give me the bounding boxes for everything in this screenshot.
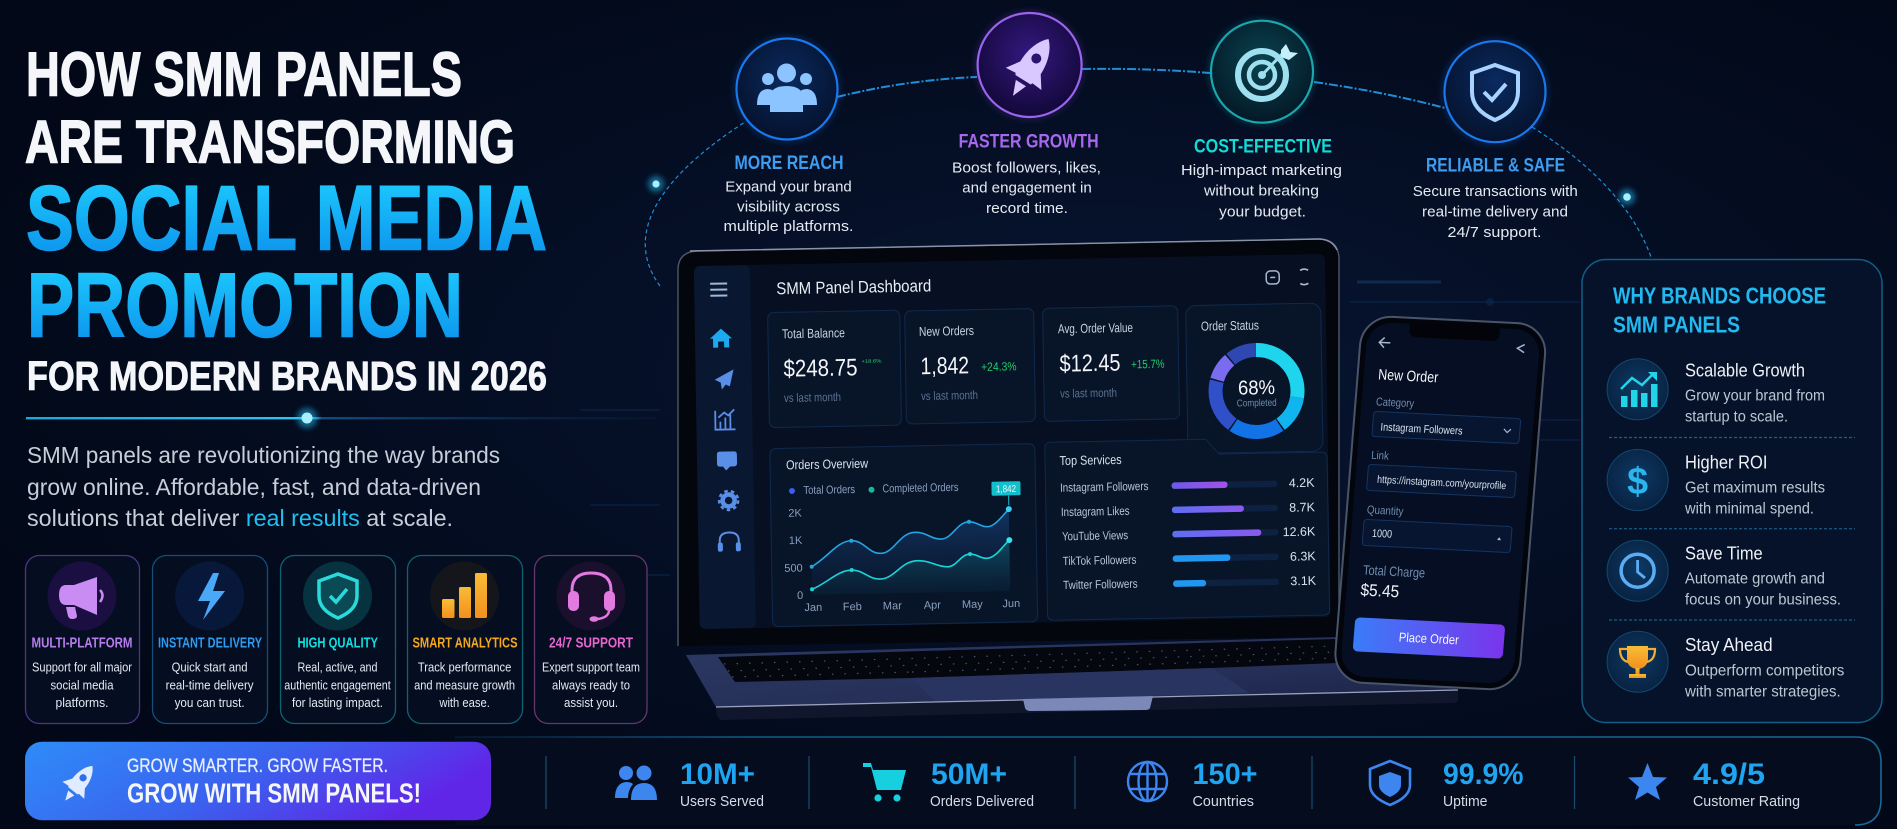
- card: smart analytics: and measure growth: [414, 677, 515, 692]
- feature: reliable & safe: Secure transactions with: [1413, 183, 1578, 200]
- card: multi-platform: social media: [50, 677, 114, 692]
- icon: people: [757, 64, 817, 112]
- stat: customer rating: [1628, 758, 1800, 810]
- feature: reliable & safe: 24/7 support.: [1448, 224, 1542, 241]
- panel: why brands choose: [1582, 260, 1882, 722]
- icon: cart: [863, 763, 906, 802]
- feature: cost-effective: without breaking: [1203, 183, 1319, 200]
- panel heading: [1613, 282, 1826, 337]
- stat card: average order value: +15.7%: [1131, 357, 1165, 371]
- bar list: top services: Instagram Likes: [1061, 504, 1130, 519]
- icon: shield check: [1472, 65, 1518, 120]
- intro paragraph: grow online. Affordable, fast, and data-driven: [27, 474, 481, 500]
- feature: more reach: multiple platforms.: [724, 218, 854, 235]
- bar list: top services: 6.3K: [1290, 549, 1316, 564]
- feature: faster growth: record time.: [986, 200, 1068, 217]
- stat card: total balance: $248.75: [783, 354, 858, 383]
- phone: Total Charge: [1363, 562, 1426, 581]
- dashboard screen: SMM Panel Dashboard: [776, 276, 931, 298]
- line chart: orders overview: May: [962, 599, 983, 611]
- icon: megaphone: [59, 577, 102, 619]
- line chart: orders overview: Mar: [883, 600, 902, 613]
- stat card: new orders: 1,842: [920, 352, 969, 380]
- item: stay ahead: with smarter strategies.: [1684, 684, 1841, 701]
- item: scalable growth: startup to scale.: [1685, 409, 1788, 426]
- title: FOR MODERN BRANDS IN 2026: [27, 353, 547, 399]
- title: SOCIAL MEDIA: [26, 168, 547, 270]
- panel: feature cards: [26, 556, 647, 724]
- bar list: top services: YouTube Views: [1062, 528, 1128, 543]
- stat: users served: [615, 758, 764, 810]
- bar list: top services: 8.7K: [1289, 500, 1316, 515]
- card: high quality: for lasting impact.: [292, 695, 383, 710]
- stat card: average order value: Avg. Order Value: [1058, 320, 1133, 336]
- feature: cost-effective: [1181, 20, 1342, 221]
- icon: globe: [1128, 762, 1167, 801]
- dashed connector arc: [645, 69, 1651, 286]
- card: high quality: Real, active, and: [298, 660, 378, 675]
- order form: [1362, 396, 1522, 553]
- line chart: orders overview: Jun: [1002, 598, 1020, 610]
- feature: faster growth: [952, 12, 1101, 217]
- phone header icons: [1379, 337, 1525, 355]
- card: instant delivery: INSTANT DELIVERY: [158, 635, 262, 651]
- stat: orders delivered: 50M+: [931, 758, 1007, 791]
- icon: target: [1238, 44, 1298, 99]
- bar list: top services: 3.1K: [1290, 574, 1317, 588]
- title: ARE TRANSFORMING: [25, 108, 515, 176]
- intro paragraph: SMM panels are revolutionizing the way brands: [27, 442, 500, 468]
- gear: [719, 491, 738, 510]
- phone: $5.45: [1360, 580, 1400, 601]
- item: stay ahead: Stay Ahead: [1685, 635, 1773, 655]
- stat card: new orders: vs last month: [921, 388, 978, 403]
- icon: rocket: [995, 28, 1066, 107]
- bar list: top services: Instagram Followers: [1060, 479, 1149, 495]
- item: stay ahead: [1607, 631, 1845, 701]
- card: smart analytics: Track performance: [418, 660, 511, 675]
- stat: uptime: 99.9%: [1443, 758, 1524, 791]
- phone notch: [1409, 323, 1500, 341]
- call to action banner: [25, 742, 491, 820]
- line chart: orders overview: Feb: [843, 601, 862, 613]
- button: place order: [1353, 617, 1505, 659]
- card: multi-platform: [26, 556, 140, 724]
- laptop base: [686, 637, 1458, 720]
- item: scalable growth: Grow your brand from: [1685, 388, 1825, 405]
- feature: cost-effective: High-impact marketing: [1181, 162, 1342, 179]
- stat card: average order value: $12.45: [1059, 350, 1121, 378]
- feature: more reach: [724, 37, 854, 235]
- stat: customer rating: 4.9/5: [1693, 758, 1765, 791]
- header icons: [1266, 269, 1308, 285]
- order form: 1000: [1372, 528, 1393, 541]
- card: instant delivery: Quick start and: [172, 660, 248, 675]
- bar list: top services: TikTok Followers: [1063, 553, 1137, 568]
- icon: shield check: [319, 574, 357, 618]
- title: HOW SMM PANELS: [26, 40, 462, 110]
- bar list: top services: [1045, 437, 1330, 620]
- card: multi-platform: MULTI-PLATFORM: [32, 635, 132, 651]
- card: high quality: authentic engagement: [284, 677, 391, 692]
- card: high quality: [280, 556, 396, 724]
- panel heading: WHY BRANDS CHOOSE: [1613, 282, 1826, 308]
- title: PROMOTION: [27, 256, 463, 356]
- stat card: average order value: vs last month: [1060, 386, 1117, 401]
- connector nodes: [648, 176, 1635, 205]
- dashboard screen: [694, 254, 1331, 629]
- card: 24/7 support: assist you.: [564, 695, 618, 710]
- donut: order status: Completed: [1237, 398, 1277, 409]
- icon: bar chart: [442, 573, 487, 618]
- icon: shield: [1370, 761, 1410, 805]
- card: 24/7 support: Expert support team: [542, 660, 640, 675]
- stat card: total balance: +18.6%: [861, 358, 882, 365]
- card: instant delivery: [152, 556, 268, 724]
- card: 24/7 support: 24/7 SUPPORT: [549, 635, 633, 651]
- feature: more reach: Expand your brand: [725, 179, 852, 196]
- donut: order status: 68%: [1238, 377, 1275, 400]
- item: save time: Save Time: [1685, 543, 1763, 563]
- line chart: orders overview: 1K: [789, 535, 803, 547]
- tooltip: 1,842: [996, 484, 1016, 495]
- panel heading: SMM PANELS: [1613, 311, 1740, 337]
- line chart: orders overview: Total Orders: [803, 484, 855, 497]
- card: high quality: HIGH QUALITY: [297, 635, 378, 651]
- intro paragraph: solutions that deliver real results at scale.: [27, 505, 453, 531]
- feature: reliable & safe: RELIABLE & SAFE: [1426, 155, 1565, 177]
- line chart: orders overview: 0: [797, 590, 803, 602]
- feature: faster growth: FASTER GROWTH: [959, 130, 1099, 152]
- feature: faster growth: Boost followers, likes,: [952, 160, 1101, 177]
- stat: countries: Countries: [1192, 794, 1254, 810]
- item: scalable growth: [1607, 359, 1825, 426]
- item: higher roi: [1607, 450, 1825, 517]
- item: stay ahead: Outperform competitors: [1685, 663, 1845, 680]
- feature: more reach: visibility across: [737, 199, 840, 216]
- order form: Category: [1376, 396, 1415, 410]
- button: place order: Place Order: [1398, 630, 1460, 648]
- donut: order status: Order Status: [1201, 318, 1259, 334]
- feature: reliable & safe: real-time delivery and: [1422, 204, 1568, 221]
- icon: trophy: [1620, 646, 1655, 678]
- card: multi-platform: platforms.: [56, 695, 108, 710]
- stat card: total balance: [768, 310, 901, 428]
- line chart: orders overview: 2K: [788, 507, 803, 520]
- item: higher roi: Get maximum results: [1685, 479, 1825, 496]
- stat card: new orders: [905, 309, 1035, 424]
- line chart: orders overview: [770, 444, 1038, 627]
- stat card: average order value: [1043, 306, 1179, 421]
- call to action banner: GROW SMARTER. GROW FASTER.: [127, 756, 388, 777]
- feature: faster growth: and engagement in: [962, 180, 1092, 197]
- icon: headset: [568, 573, 615, 622]
- line chart: orders overview: Jan: [804, 602, 822, 614]
- item: save time: [1607, 540, 1841, 608]
- stat: countries: 150+: [1192, 758, 1258, 791]
- title: [25, 40, 547, 399]
- icon: dollar: $: [1627, 461, 1648, 503]
- item: scalable growth: Scalable Growth: [1685, 361, 1805, 381]
- icon: lightning bolt: [198, 573, 225, 620]
- stat: customer rating: Customer Rating: [1693, 794, 1800, 810]
- bar list: top services: 12.6K: [1283, 525, 1316, 539]
- stats bar: [455, 737, 1881, 825]
- bar list: top services: Twitter Followers: [1063, 577, 1138, 592]
- line chart: orders overview: Orders Overview: [786, 456, 869, 472]
- feature: more reach: MORE REACH: [734, 152, 844, 174]
- bar list: top services: Top Services: [1059, 452, 1122, 468]
- feature: reliable & safe: [1413, 40, 1578, 241]
- stat card: new orders: +24.3%: [981, 359, 1017, 374]
- card: multi-platform: Support for all major: [32, 660, 133, 675]
- item: higher roi: with minimal spend.: [1684, 500, 1814, 517]
- feature: cost-effective: your budget.: [1219, 204, 1306, 221]
- feature: cost-effective: COST-EFFECTIVE: [1194, 135, 1332, 157]
- phone: [1333, 315, 1547, 691]
- card: 24/7 support: always ready to: [552, 677, 630, 692]
- stat: orders delivered: [863, 758, 1034, 810]
- sidebar icons: [709, 283, 741, 552]
- icon: star: [1628, 763, 1667, 800]
- donut: order status: [1186, 303, 1323, 454]
- card: smart analytics: [408, 556, 522, 724]
- order form: Instagram Followers: [1380, 421, 1463, 438]
- item: save time: Automate growth and: [1685, 570, 1825, 587]
- line chart: orders overview: Completed Orders: [882, 482, 959, 495]
- call to action banner: GROW WITH SMM PANELS!: [127, 778, 421, 809]
- stat: uptime: Uptime: [1443, 794, 1488, 810]
- order form: Link: [1371, 450, 1389, 463]
- icon: growth chart: [1621, 372, 1658, 407]
- stat: users served: Users Served: [680, 794, 764, 810]
- laptop: [678, 239, 1458, 720]
- stat: orders delivered: Orders Delivered: [930, 794, 1034, 810]
- stat: users served: 10M+: [680, 758, 755, 791]
- intro paragraph: [27, 442, 500, 531]
- icon: clock: [1621, 554, 1654, 587]
- stat card: new orders: New Orders: [919, 323, 974, 339]
- line chart: orders overview: Apr: [924, 599, 941, 612]
- card: instant delivery: you can trust.: [175, 695, 245, 710]
- phone: New Order: [1378, 366, 1439, 386]
- line chart: orders overview: 500: [784, 562, 803, 575]
- card: 24/7 support: [534, 556, 647, 724]
- stat card: total balance: vs last month: [784, 390, 841, 405]
- bar list: top services: 4.2K: [1289, 476, 1315, 490]
- card: smart analytics: SMART ANALYTICS: [412, 635, 518, 651]
- card: instant delivery: real-time delivery: [166, 677, 254, 692]
- card: smart analytics: with ease.: [438, 695, 490, 710]
- stat card: total balance: Total Balance: [782, 325, 845, 341]
- item: higher roi: Higher ROI: [1685, 452, 1767, 472]
- item: save time: focus on your business.: [1685, 591, 1841, 608]
- icon: users: [615, 766, 657, 800]
- divider with glowing dot: [26, 408, 656, 428]
- laptop lid: [678, 239, 1340, 646]
- order form: Quantity: [1366, 504, 1404, 518]
- tooltip: [991, 481, 1021, 505]
- icon: rocket: [54, 757, 103, 809]
- stat: uptime: [1370, 758, 1524, 810]
- stat: countries: [1128, 758, 1258, 810]
- order form: https://instagram.com/yourprofile: [1377, 474, 1507, 492]
